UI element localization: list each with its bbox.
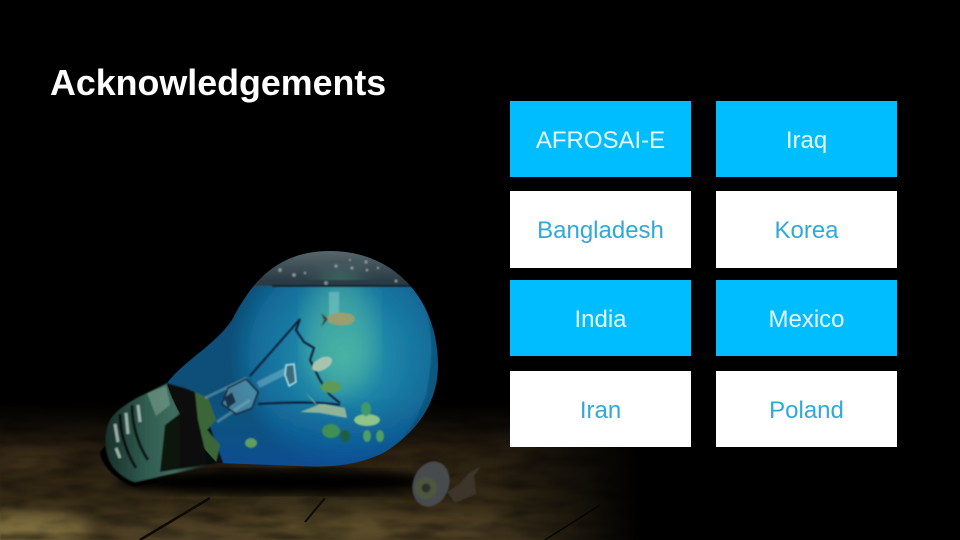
fish: [245, 312, 384, 448]
cell: Bangladesh: Bangladesh: [537, 217, 664, 244]
filament and stem: [205, 319, 340, 422]
cell: AFROSAI-E: AFROSAI-E: [536, 126, 665, 154]
seaweed: [167, 383, 224, 465]
cell: Iran: Iran: [580, 396, 621, 424]
cell: Poland: [716, 371, 897, 447]
cell: Iraq: Iraq: [786, 126, 827, 154]
cell: Poland: Poland: [769, 396, 844, 424]
cell: India: India: [574, 306, 627, 332]
cell: Iraq: [716, 101, 897, 177]
illustration: light bulb aquarium on wooden table: [0, 251, 622, 540]
cell: Iran: [510, 371, 691, 447]
bulb shadow: [115, 470, 445, 494]
water droplets: [278, 259, 398, 285]
screw base: [100, 383, 217, 487]
snail: [406, 456, 481, 512]
cell: Korea: [716, 191, 897, 268]
cell: Mexico: Mexico: [768, 306, 845, 332]
title: Acknowledgements: [50, 63, 386, 103]
cell: India: [510, 280, 691, 356]
cell: AFROSAI-E: [510, 101, 691, 177]
glass bulb with water: [167, 251, 438, 467]
cell: Bangladesh: [510, 191, 691, 268]
cell: Korea: Korea: [774, 217, 839, 244]
wooden table: [0, 395, 640, 540]
cell: Mexico: [716, 280, 897, 356]
